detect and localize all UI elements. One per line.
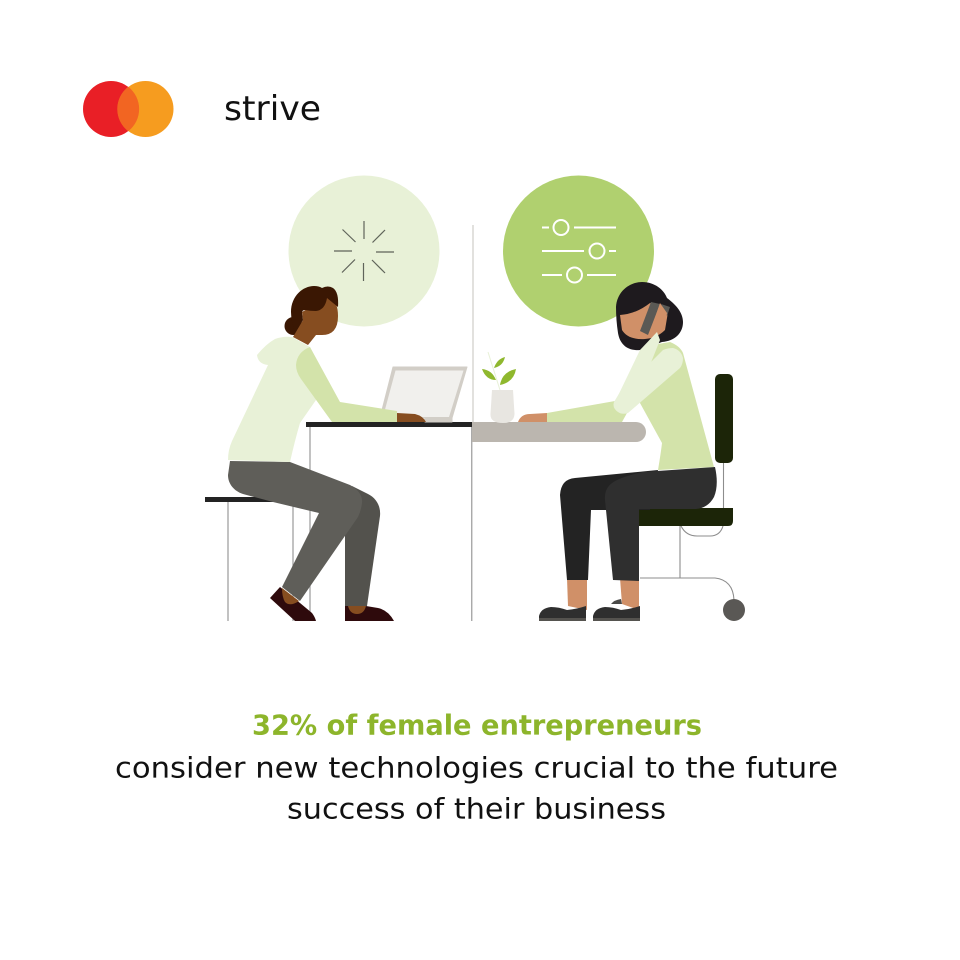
icon: green circle with sliders xyxy=(503,176,654,326)
line three: success of their business xyxy=(287,792,666,826)
hand xyxy=(397,413,426,422)
front leg xyxy=(228,461,362,601)
icon: light circle with starburst xyxy=(288,176,440,326)
headline text xyxy=(115,708,838,826)
logo: overlapping circles xyxy=(83,81,174,137)
laptop xyxy=(380,367,467,422)
upper sleeve xyxy=(614,348,683,414)
divider line xyxy=(472,225,473,621)
left desk xyxy=(306,422,472,621)
shoes xyxy=(539,606,586,621)
plant in vase xyxy=(482,352,516,423)
back hair bun xyxy=(284,317,302,335)
hair xyxy=(291,286,338,333)
line two: consider new technologies crucial to the future xyxy=(115,752,838,784)
right desk xyxy=(472,422,646,442)
stool xyxy=(205,497,293,621)
back leg xyxy=(345,486,380,606)
back leg xyxy=(560,470,658,580)
brand name: strive xyxy=(224,89,321,129)
ankles xyxy=(567,578,587,610)
hair xyxy=(616,282,683,350)
office chair xyxy=(630,374,745,621)
shirt xyxy=(228,337,316,462)
face xyxy=(620,303,668,339)
forearm xyxy=(547,401,627,422)
figure: person on phone, right xyxy=(518,282,717,621)
head and neck xyxy=(293,296,338,345)
shoes xyxy=(270,587,316,621)
raised arm xyxy=(615,332,660,412)
front leg xyxy=(605,467,717,581)
torso xyxy=(640,342,714,470)
sleeve xyxy=(296,347,397,422)
ankles xyxy=(282,588,299,604)
highlighted statistic: 32% of female entrepreneurs xyxy=(252,708,702,742)
figure: person on laptop, left xyxy=(228,286,426,621)
hand on phone xyxy=(650,303,667,335)
phone xyxy=(640,302,670,335)
hand xyxy=(518,413,547,422)
